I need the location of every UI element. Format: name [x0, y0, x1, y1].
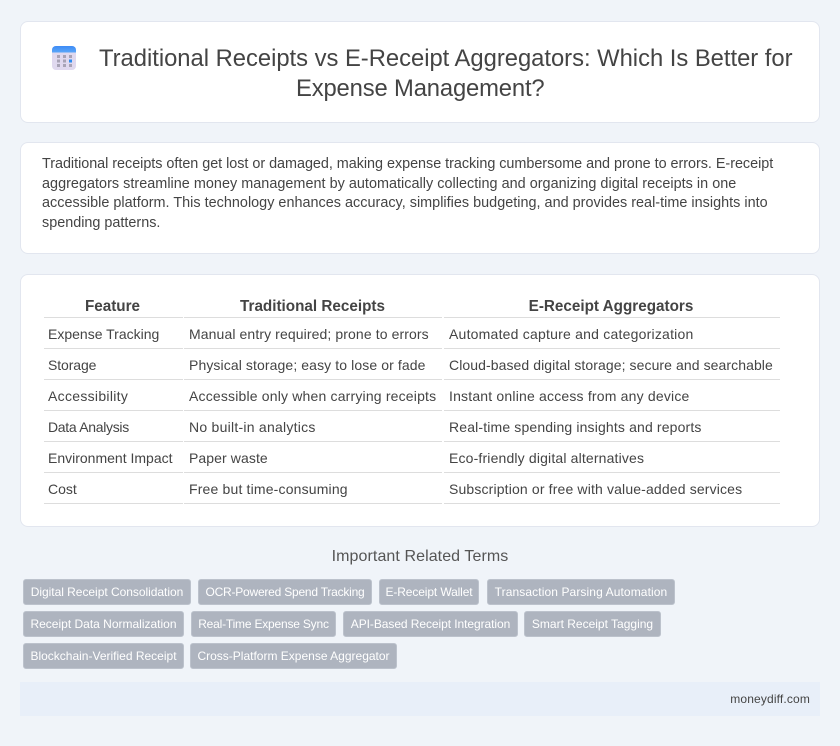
table rows: Storage	[48, 357, 96, 373]
table rows	[44, 317, 780, 504]
table rows: Real-time spending insights and reports	[449, 419, 702, 435]
table rows: Accessibility	[48, 388, 128, 404]
table rows: Subscription or free with value-added services	[449, 481, 742, 497]
intro text: spending patterns.	[42, 214, 160, 230]
table rows: Instant online access from any device	[449, 388, 689, 404]
table rows: Cloud-based digital storage; secure and searchable	[449, 357, 773, 373]
intro text: accessible platform. This technology enhances accuracy, simplifies budgeting, and provides real-time insights into	[42, 195, 768, 211]
icon: calendar	[52, 46, 76, 70]
related term tags: Real-Time Expense Sync	[198, 617, 329, 631]
title: Expense Management?	[296, 75, 545, 102]
intro text	[42, 156, 774, 230]
footer	[20, 682, 820, 716]
table headers: Feature	[85, 298, 140, 315]
panel: comparison table	[20, 274, 820, 527]
table rows: Manual entry required; prone to errors	[189, 326, 429, 342]
table rows: Accessible only when carrying receipts	[189, 388, 436, 404]
intro text: aggregators streamline money management by automatically collecting and organizing digital receipts in one	[42, 176, 736, 192]
table rows: Physical storage; easy to lose or fade	[189, 357, 425, 373]
title: Traditional Receipts vs E-Receipt Aggregators: Which Is Better for	[99, 45, 792, 72]
related term tags: Transaction Parsing Automation	[495, 585, 667, 599]
related term tags: Receipt Data Normalization	[30, 617, 177, 631]
table rows: Expense Tracking	[48, 326, 159, 342]
table rows: Environment Impact	[48, 450, 172, 466]
title	[99, 45, 792, 102]
related term tags: Blockchain-Verified Receipt	[30, 649, 177, 663]
panel: header	[20, 21, 820, 123]
related term tags: Digital Receipt Consolidation	[31, 585, 183, 599]
panel: comparison table: Traditional Receipts	[240, 298, 385, 315]
related term tags: Smart Receipt Tagging	[532, 617, 653, 631]
table rows: No built-in analytics	[189, 419, 316, 435]
related terms heading: Important Related Terms	[332, 548, 508, 565]
related term tags: Cross-Platform Expense Aggregator	[197, 649, 390, 663]
table rows: Paper waste	[189, 450, 268, 466]
related term tags: OCR-Powered Spend Tracking	[205, 585, 365, 599]
related term tags: API-Based Receipt Integration	[351, 617, 510, 631]
table rows: Eco-friendly digital alternatives	[449, 450, 644, 466]
panel: intro	[20, 142, 820, 254]
table rows: Automated capture and categorization	[449, 326, 694, 342]
table rows: Data Analysis	[48, 419, 129, 435]
related term tags: E-Receipt Wallet	[386, 585, 472, 599]
footer source: moneydiff.com	[730, 692, 810, 706]
table rows: Free but time-consuming	[189, 481, 348, 497]
related term tags	[23, 579, 675, 669]
intro text: Traditional receipts often get lost or damaged, making expense tracking cumbersome and prone to errors. E-receipt	[42, 156, 773, 172]
table rows: Cost	[48, 481, 77, 497]
panel: comparison table: E-Receipt Aggregators	[529, 298, 693, 315]
